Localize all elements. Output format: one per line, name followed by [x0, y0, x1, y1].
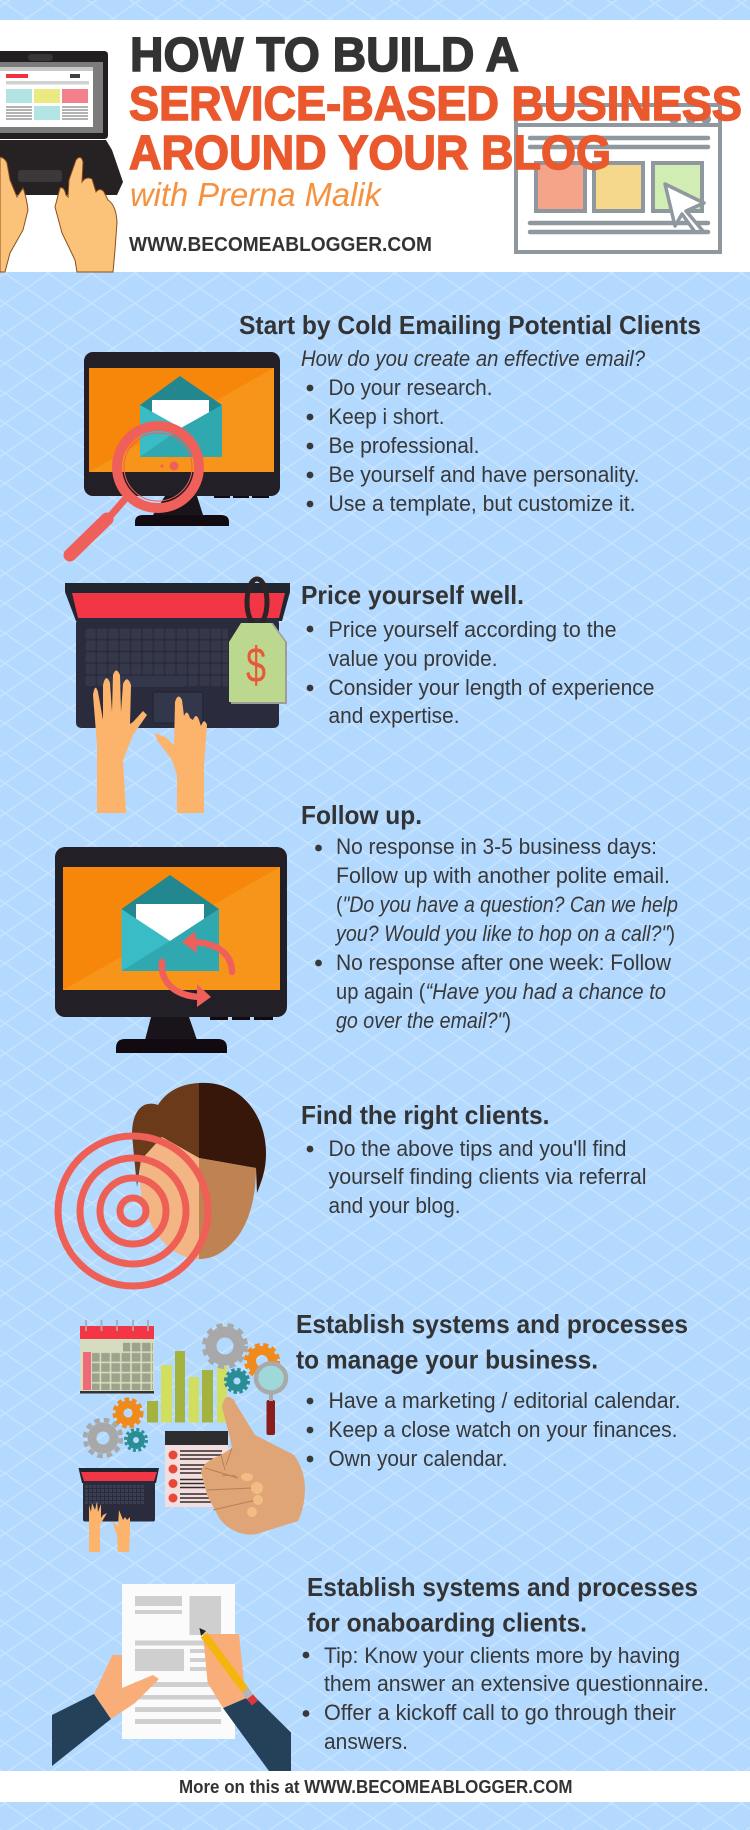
panel: pricing: [65, 579, 654, 813]
bullet list: Offer a kickoff call to go through their: [324, 1700, 676, 1725]
footer band: More on this at WWW.BECOMEABLOGGER.COM: [179, 1777, 572, 1797]
bullet list: answers.: [324, 1729, 408, 1754]
bullet list: go over the email?"): [336, 1008, 511, 1033]
bullet list: [307, 617, 654, 728]
bullet list: Do your research.: [328, 375, 492, 400]
thumbs up hand: [201, 1397, 305, 1535]
question: How do you create an effective email?: [301, 346, 646, 371]
heading: for onaboarding clients.: [307, 1608, 587, 1638]
calendar: [80, 1320, 154, 1394]
panel: right clients: [58, 1083, 646, 1286]
website url: WWW.BECOMEABLOGGER.COM: [129, 233, 432, 256]
icon: monitor with envelope and arrows: [55, 847, 287, 1053]
bullet list: Be yourself and have personality.: [328, 462, 640, 487]
checklist: [165, 1431, 228, 1507]
bullet list: Do the above tips and you'll find: [328, 1136, 626, 1161]
bullet list: Consider your length of experience: [328, 675, 654, 700]
icon: monitor with envelope and magnifier: [70, 352, 280, 555]
bullet list: Own your calendar.: [328, 1446, 508, 1471]
icon: laptop with price tag and hands: [65, 579, 290, 813]
bullet list: you? Would you like to hop on a call?"): [334, 921, 675, 946]
icon: business collage: [78, 1320, 305, 1552]
bullet list: [303, 1643, 709, 1754]
bullet list: Keep i short.: [328, 404, 444, 429]
panel: manage business: [78, 1309, 688, 1552]
heading: [307, 1572, 698, 1638]
title: AROUND YOUR BLOG: [129, 127, 611, 180]
heading: Establish systems and processes: [307, 1572, 698, 1602]
panel: cold emailing: [70, 310, 701, 555]
icon: browser window: [516, 105, 720, 252]
bar chart: [147, 1351, 227, 1422]
heading: Establish systems and processes: [296, 1309, 688, 1339]
subtitle: with Prerna Malik: [130, 176, 382, 213]
heading: Follow up.: [301, 800, 422, 830]
footer band: [0, 1771, 750, 1802]
bullet list: Have a marketing / editorial calendar.: [328, 1388, 680, 1413]
heading: to manage your business.: [296, 1344, 598, 1374]
bullet list: Follow up with another polite email.: [336, 863, 670, 888]
bullet list: No response in 3-5 business days:: [336, 834, 657, 859]
icon: head with target: [58, 1083, 266, 1286]
bullet list: and expertise.: [328, 703, 460, 728]
bullet list: No response after one week: Follow: [336, 950, 671, 975]
panel: onboarding: [52, 1572, 709, 1771]
bullet list: Use a template, but customize it.: [328, 491, 636, 516]
bullet list: and your blog.: [328, 1193, 460, 1218]
bullet list: value you provide.: [328, 646, 498, 671]
icon: hands writing on questionnaire: [52, 1584, 291, 1771]
bullet list: Be professional.: [328, 433, 480, 458]
heading: Find the right clients.: [301, 1100, 550, 1130]
heading: [296, 1309, 688, 1374]
heading: Start by Cold Emailing Potential Clients: [239, 310, 701, 340]
magnifier: [256, 1364, 286, 1435]
title: HOW TO BUILD A: [130, 29, 519, 82]
bullet list: yourself finding clients via referral: [328, 1164, 646, 1189]
gears: [85, 1326, 278, 1456]
icon: laptop with hands: [0, 51, 123, 272]
panel: header band: [0, 20, 750, 272]
bullet list: Tip: Know your clients more by having: [324, 1643, 680, 1668]
bullet list: ("Do you have a question? Can we help: [336, 892, 678, 917]
bullet list: Price yourself according to the: [328, 617, 616, 642]
bullet list: [307, 375, 640, 516]
title: [129, 29, 742, 180]
icon: laptop with price tag and hands: $: [246, 637, 266, 693]
bullet list: them answer an extensive questionnaire.: [324, 1671, 709, 1696]
panel: follow up: [55, 800, 678, 1053]
heading: Price yourself well.: [301, 580, 524, 610]
bullet list: [307, 1388, 680, 1471]
small laptop: [78, 1468, 159, 1552]
bullet list: [307, 1136, 646, 1218]
bullet list: Keep a close watch on your finances.: [328, 1417, 678, 1442]
bullet list: [315, 834, 678, 1033]
bullet list: up again (“Have you had a chance to: [336, 979, 666, 1004]
